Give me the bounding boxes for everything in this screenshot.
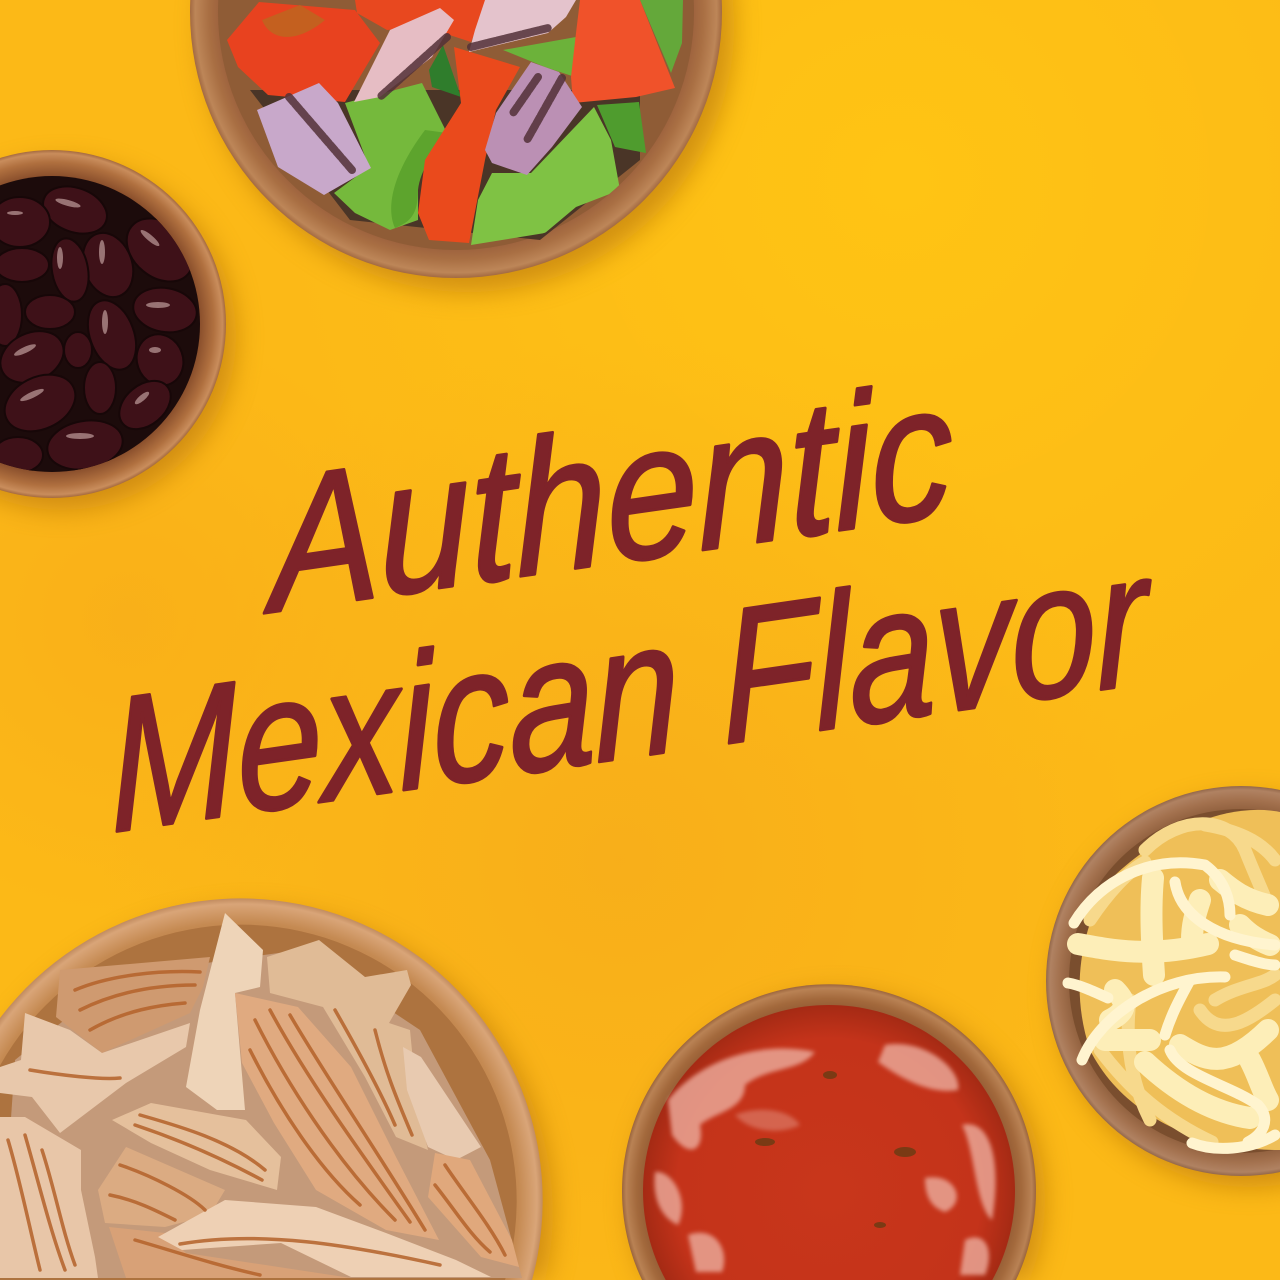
- bowl: shredded cheese: [1046, 786, 1280, 1187]
- chicken pieces: [0, 913, 522, 1278]
- headline line 1: Authentic: [257, 342, 957, 654]
- bowl: pulled chicken: [0, 898, 553, 1280]
- salsa herb flecks: [755, 1071, 916, 1228]
- bowl: red salsa: [622, 984, 1045, 1280]
- chicken sauce streaks: [8, 972, 505, 1275]
- headline: Authentic Mexican Flavor: [105, 342, 1156, 873]
- bowl: grilled peppers and onions: [190, 0, 734, 292]
- salsa glaze highlights: [654, 1044, 995, 1275]
- cheese ribbons: [1068, 824, 1275, 1148]
- bowl: black beans: [0, 150, 236, 510]
